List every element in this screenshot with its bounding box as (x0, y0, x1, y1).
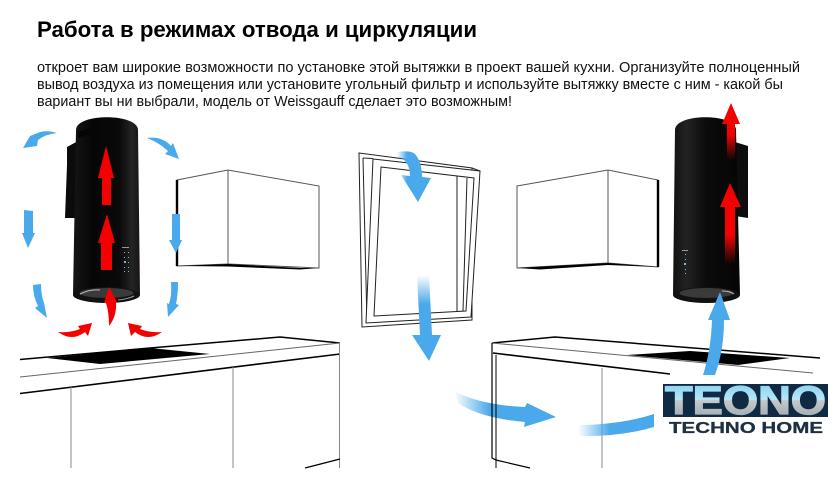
left hood with outlet (65, 117, 140, 303)
logo: TEONO Techno Home: TEONO (665, 379, 826, 423)
icon: control panel (122, 247, 129, 272)
left hood red arrows (58, 146, 162, 337)
left wall cabinet (177, 170, 319, 270)
description text: вариант вы ни выбрали, модель от Weissgauff сделает это возможным! (37, 93, 512, 110)
title: Работа в режимах отвода и циркуляции (37, 17, 477, 42)
right intake blue arrows (578, 292, 730, 436)
description text (37, 59, 800, 110)
right wall cabinet (517, 170, 658, 270)
description text: вывод воздуха из помещения или установите угольный фильтр и используйте вытяжку вместе с ним - какой бы (37, 76, 783, 93)
left circulation blue arrows (22, 131, 182, 318)
right kitchen counter (492, 337, 820, 468)
left kitchen counter (20, 337, 340, 468)
window (359, 153, 480, 327)
right hood with outlet (673, 117, 748, 303)
window blue arrows (397, 151, 556, 427)
right hood red arrows (720, 103, 741, 264)
logo: TEONO Techno Home: TECHNO HOME (669, 420, 823, 437)
logo: TEONO Techno Home (654, 378, 840, 440)
icon: control panel (682, 250, 688, 274)
description text: откроет вам широкие возможности по установке этой вытяжки в проект вашей кухни. Организуйте полноценный (37, 59, 800, 76)
